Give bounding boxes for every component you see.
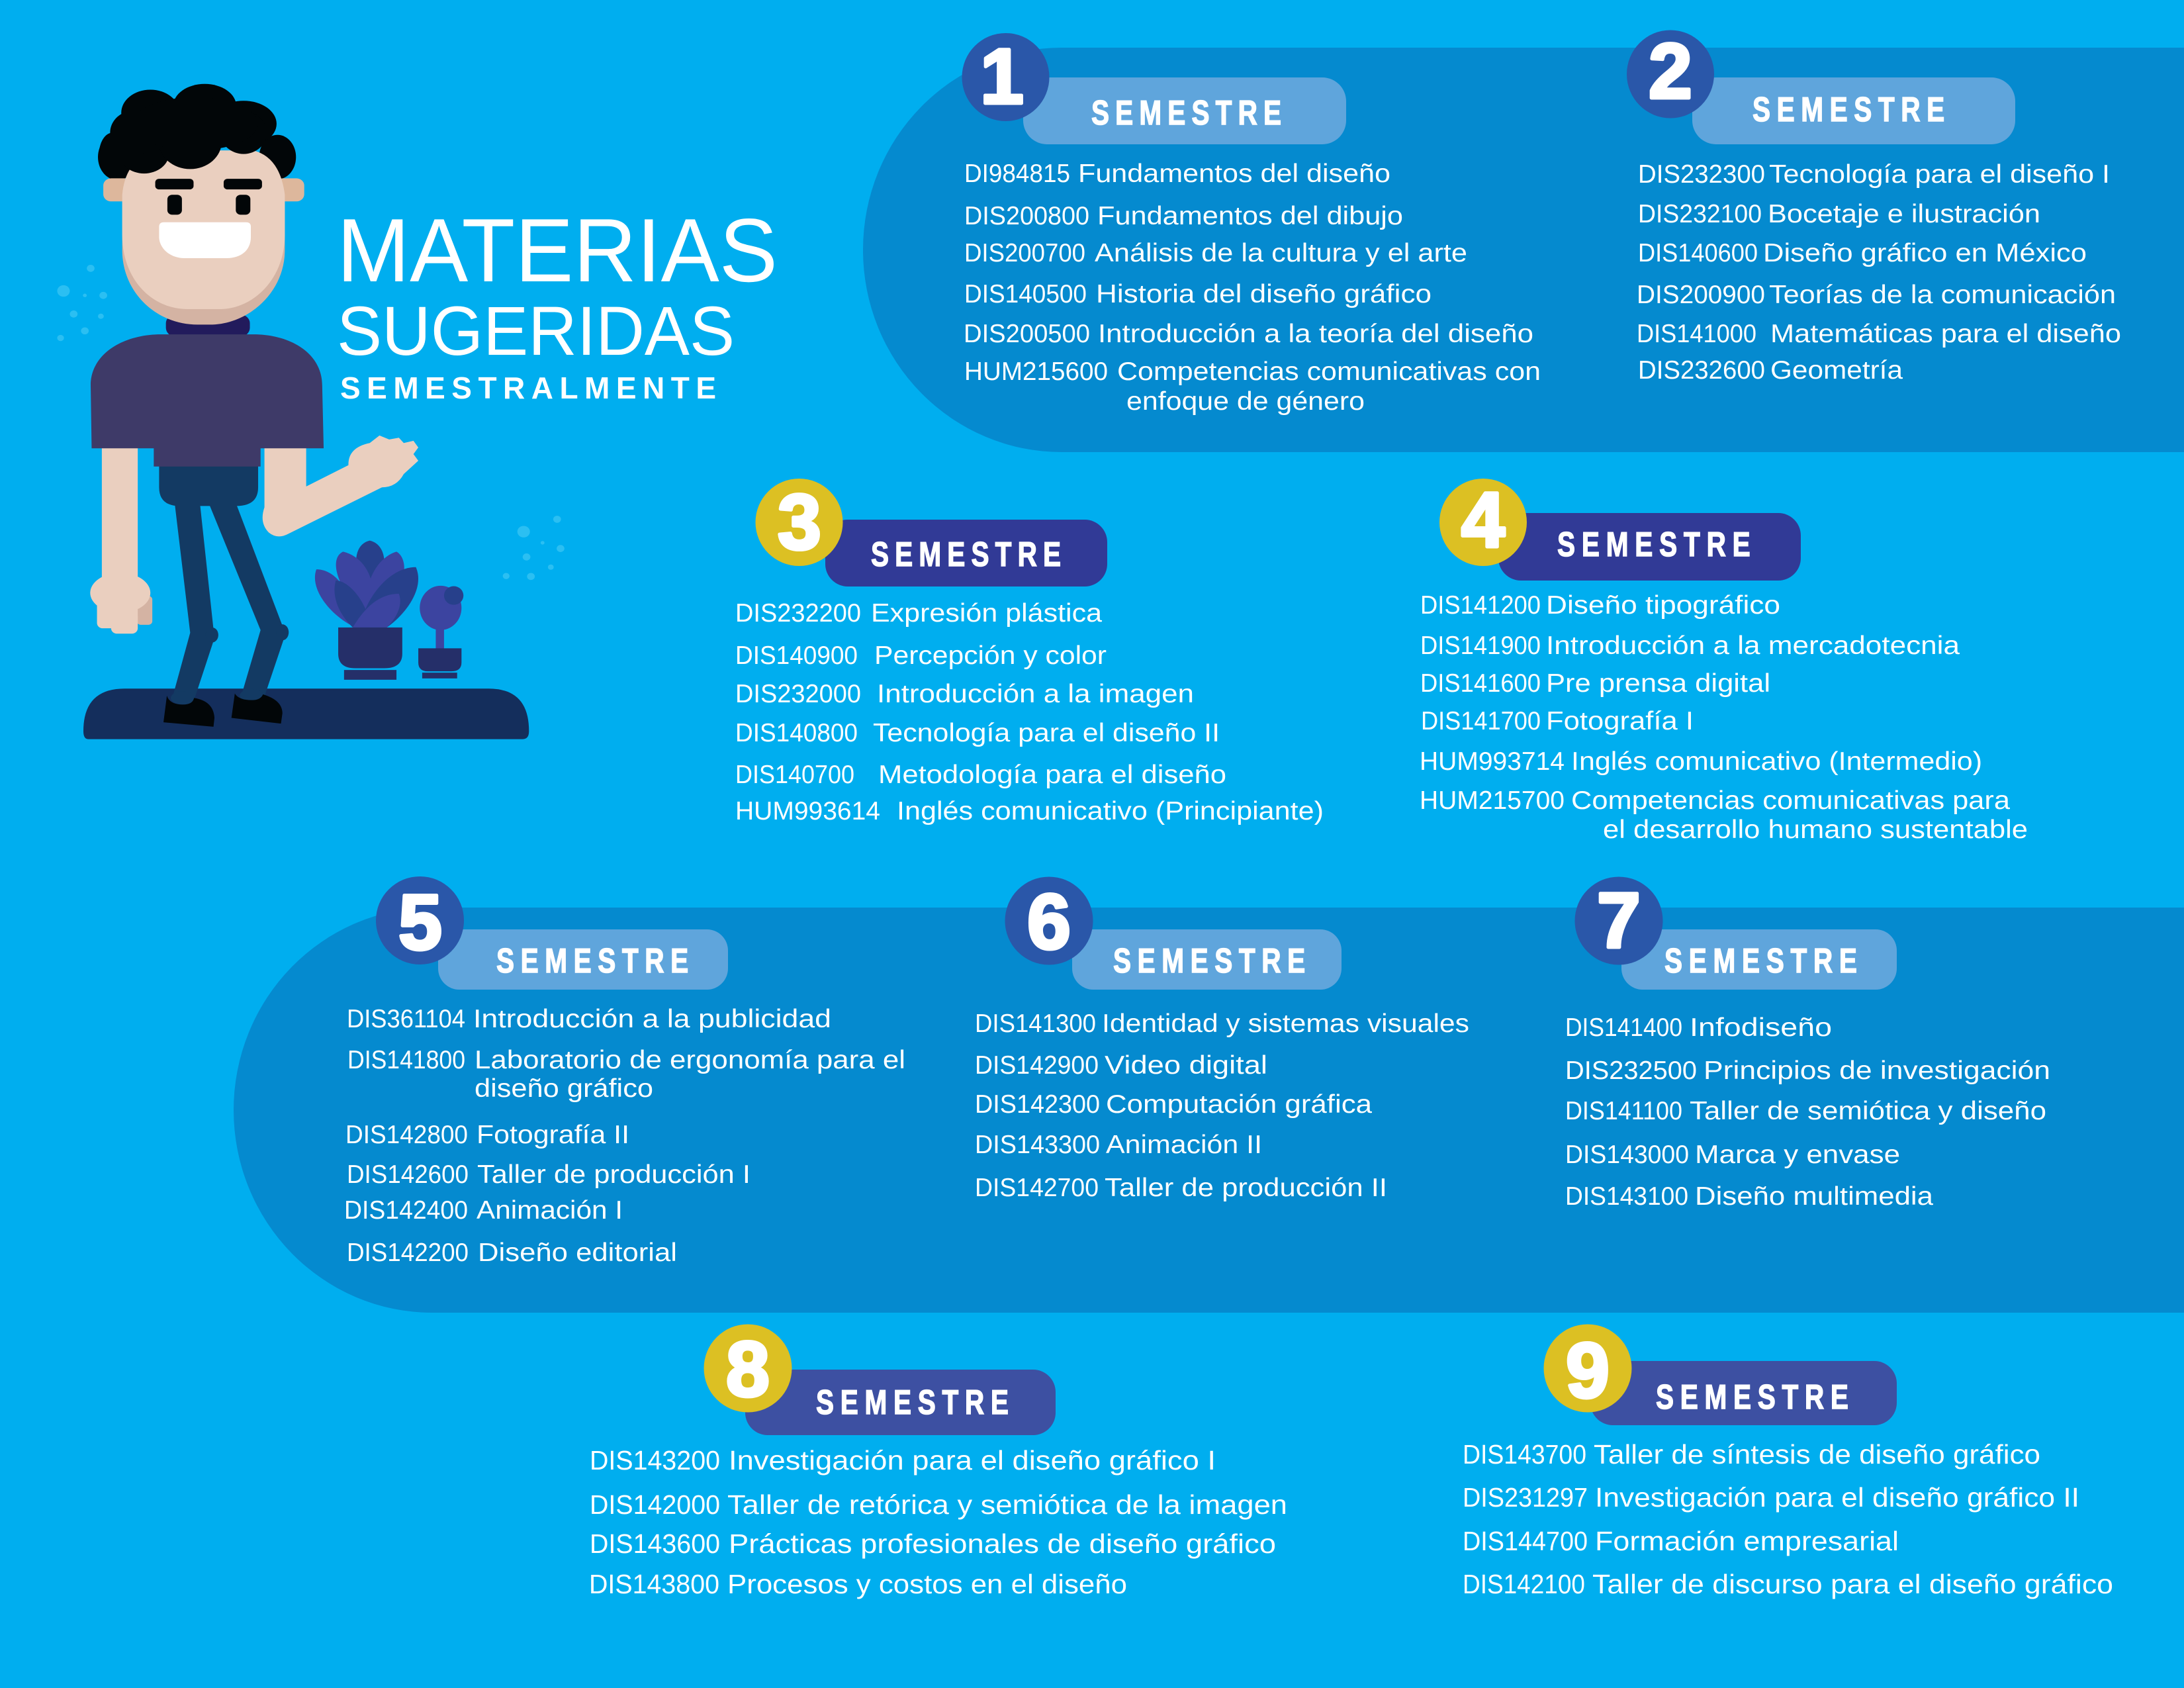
number badge: [756, 479, 843, 566]
heading pill: [1590, 1361, 1897, 1425]
course list: [1637, 160, 2121, 385]
course list: Tecnología para el diseño I: [1769, 160, 2110, 189]
neck: [166, 314, 250, 337]
course list: HUM993614: [735, 797, 880, 825]
course list: Taller de producción I: [477, 1160, 751, 1189]
course list: Video digital: [1105, 1051, 1267, 1080]
course list: DIS200700: [964, 239, 1085, 267]
course list: DIS141800: [347, 1046, 465, 1074]
course list: DIS232600: [1638, 356, 1765, 385]
hair back: [98, 134, 296, 180]
number badge: 6: [1027, 878, 1071, 966]
decorative dots right: [503, 516, 565, 580]
smile: [159, 222, 251, 258]
course list: [344, 1005, 905, 1267]
course list: Diseño editorial: [478, 1239, 677, 1267]
course list: Taller de síntesis de diseño gráfico: [1594, 1439, 2040, 1470]
course list: DIS142800: [345, 1121, 468, 1149]
ears: [103, 178, 304, 201]
course list: DIS142700: [975, 1174, 1099, 1202]
course list: Expresión plástica: [871, 599, 1102, 628]
panel: semester 6: [975, 876, 1469, 1202]
heading pill: SEMESTRE: [871, 535, 1061, 573]
panel: semester 4: [1420, 477, 2028, 844]
course list: Teorías de la comunicación: [1769, 281, 2116, 309]
course list: Introducción a la mercadotecnia: [1546, 632, 1960, 660]
course list: Computación gráfica: [1106, 1090, 1372, 1119]
course list: HUM215700: [1420, 786, 1565, 815]
heading pill: [1498, 513, 1801, 581]
heading pill: [1023, 77, 1346, 144]
course list: Laboratorio de ergonomía para el: [475, 1046, 905, 1074]
heading pill: SEMESTRE: [1557, 525, 1751, 563]
course list: DI984815: [964, 160, 1070, 188]
panel: semester 5: [344, 876, 905, 1267]
title line 2: SUGERIDAS: [337, 293, 735, 370]
panel: semester 8: [589, 1324, 1287, 1599]
course list: DIS232000: [735, 680, 861, 708]
eyes: [167, 195, 250, 214]
heading pill: [438, 929, 728, 990]
number badge: 4: [1461, 477, 1505, 564]
course list: DIS232100: [1638, 200, 1762, 228]
panel: semester 7: [1565, 876, 2050, 1211]
course list: DIS143100: [1565, 1182, 1688, 1211]
course list: [1420, 591, 2028, 844]
course list: Animación II: [1106, 1131, 1262, 1159]
course list: DIS142000: [590, 1489, 720, 1520]
heading pill: SEMESTRE: [816, 1383, 1009, 1421]
course list: DIS232300: [1638, 160, 1765, 189]
course list: Taller de semiótica y diseño: [1690, 1097, 2046, 1125]
course list: DIS142900: [975, 1051, 1099, 1080]
title line 1: MATERIAS: [337, 200, 778, 301]
course list: Taller de discurso para el diseño gráfico: [1592, 1569, 2113, 1599]
course list: DIS140700: [735, 761, 854, 789]
course list: enfoque de género: [1126, 387, 1365, 416]
course list: [964, 160, 1541, 416]
number badge: [1439, 477, 1527, 566]
heading pill: [825, 520, 1107, 586]
course list: DIS143300: [975, 1131, 1100, 1159]
course list: Diseño multimedia: [1695, 1182, 1933, 1211]
shirt: [91, 334, 324, 467]
course list: DIS141600: [1420, 669, 1541, 698]
course list: Competencias comunicativas con: [1117, 357, 1541, 386]
course list: DIS140900: [735, 641, 858, 670]
course list: Geometría: [1770, 356, 1903, 385]
face shadow: [122, 199, 285, 324]
course list: DIS141000: [1637, 320, 1756, 348]
heading pill: [1072, 929, 1342, 990]
hair front: [99, 84, 277, 177]
legs: [171, 503, 289, 704]
course list: DIS143600: [590, 1528, 720, 1559]
course list: DIS140600: [1638, 239, 1758, 267]
course list: Animación I: [477, 1196, 623, 1225]
course list: DIS143800: [589, 1569, 719, 1599]
course list: DIS361104: [347, 1005, 465, 1033]
heading pill: [745, 1370, 1056, 1435]
course list: DIS141100: [1565, 1097, 1682, 1125]
number badge: [1627, 28, 1714, 118]
course list: Prácticas profesionales de diseño gráfico: [729, 1528, 1276, 1559]
course list: [1463, 1439, 2113, 1599]
course list: Inglés comunicativo (Principiante): [897, 797, 1324, 825]
course list: HUM215600: [964, 357, 1108, 386]
panel: semester 1: [962, 33, 1541, 416]
course list: Fundamentos del diseño: [1078, 160, 1390, 188]
panel: semester 9: [1463, 1324, 2113, 1599]
course list: Introducción a la imagen: [877, 680, 1194, 708]
course list: Competencias comunicativas para: [1571, 786, 2010, 815]
number badge: [1575, 876, 1662, 965]
subtitle: SEMESTRALMENTE: [340, 371, 716, 405]
course list: Fotografía I: [1546, 707, 1694, 735]
course list: DIS200500: [964, 320, 1090, 348]
course list: Formación empresarial: [1595, 1526, 1899, 1556]
heading pill: SEMESTRE: [1091, 93, 1281, 132]
number badge: 2: [1649, 28, 1692, 115]
course list: DIS142200: [347, 1239, 469, 1267]
large potted plant: [315, 541, 418, 680]
course list: Matemáticas para el diseño: [1770, 320, 2121, 348]
course list: [1565, 1013, 2050, 1211]
course list: DIS231297: [1463, 1482, 1588, 1513]
course list: Pre prensa digital: [1546, 669, 1770, 698]
heading pill: [1692, 77, 2015, 144]
course list: [735, 599, 1324, 825]
number badge: [962, 33, 1050, 121]
raised arm and hand: [263, 436, 418, 536]
course list: el desarrollo humano sustentable: [1603, 816, 2028, 844]
heading pill: SEMESTRE: [1656, 1378, 1848, 1416]
course list: DIS142300: [975, 1090, 1100, 1119]
number badge: [1543, 1324, 1632, 1415]
course list: Percepción y color: [874, 641, 1107, 670]
course list: Marca y envase: [1695, 1141, 1900, 1169]
course list: [589, 1445, 1287, 1599]
course list: DIS142400: [344, 1196, 468, 1225]
course list: DIS200800: [964, 202, 1089, 230]
course list: Identidad y sistemas visuales: [1102, 1009, 1469, 1038]
course list: Fundamentos del dibujo: [1097, 202, 1403, 230]
course list: Introducción a la publicidad: [473, 1005, 831, 1033]
course list: DIS142100: [1463, 1569, 1585, 1599]
shoes: [163, 694, 283, 727]
heading pill: SEMESTRE: [496, 941, 688, 980]
course list: Metodología para el diseño: [878, 761, 1226, 789]
course list: DIS143200: [590, 1445, 720, 1476]
course list: Infodiseño: [1690, 1013, 1832, 1042]
course list: Historia del diseño gráfico: [1096, 280, 1432, 308]
floor: [83, 688, 529, 739]
course list: [975, 1009, 1469, 1202]
course list: DIS140500: [964, 280, 1087, 308]
course list: Taller de retórica y semiótica de la imagen: [727, 1489, 1287, 1520]
course list: Principios de investigación: [1704, 1056, 2050, 1085]
course list: DIS232500: [1565, 1056, 1697, 1085]
course list: DIS141900: [1420, 632, 1541, 660]
course list: Inglés comunicativo (Intermedio): [1571, 747, 1982, 776]
course list: Introducción a la teoría del diseño: [1098, 320, 1533, 348]
panel: semester 3: [735, 479, 1324, 825]
title: [337, 200, 778, 405]
course list: DIS141200: [1420, 591, 1541, 620]
course list: diseño gráfico: [475, 1074, 653, 1103]
heading pill: SEMESTRE: [1113, 941, 1305, 980]
number badge: 1: [980, 33, 1024, 120]
number badge: 3: [778, 479, 821, 566]
number badge: 7: [1597, 877, 1641, 964]
number badge: [376, 876, 464, 966]
number badge: [704, 1324, 792, 1413]
course list: Investigación para el diseño gráfico II: [1595, 1482, 2079, 1513]
illustration: character and plants: [57, 84, 565, 739]
course list: Bocetaje e ilustración: [1768, 200, 2040, 228]
left arm and fist: [90, 447, 152, 633]
course list: DIS144700: [1463, 1526, 1588, 1556]
course list: Diseño gráfico en México: [1763, 239, 2087, 267]
number badge: 8: [726, 1326, 770, 1413]
course list: DIS143000: [1565, 1141, 1689, 1169]
heading pill: SEMESTRE: [1664, 941, 1857, 980]
course list: Análisis de la cultura y el arte: [1095, 239, 1467, 267]
panel background: semesters 5 to 7: [234, 908, 2184, 1313]
panel background: semesters 1 and 2: [863, 48, 2184, 452]
panel: semester 2: [1627, 28, 2121, 385]
course list: Procesos y costos en el diseño: [727, 1569, 1127, 1599]
course list: Investigación para el diseño gráfico I: [729, 1445, 1216, 1476]
eyebrows: [156, 179, 262, 189]
course list: DIS143700: [1463, 1439, 1586, 1470]
character: [90, 84, 418, 727]
heading pill: SEMESTRE: [1752, 90, 1944, 128]
course list: DIS140800: [735, 719, 858, 747]
course list: DIS141300: [975, 1009, 1096, 1038]
course list: DIS142600: [347, 1160, 469, 1189]
course list: DIS232200: [735, 599, 861, 628]
course list: DIS141700: [1421, 707, 1541, 735]
course list: Tecnología para el diseño II: [873, 719, 1220, 747]
course list: HUM993714: [1420, 747, 1565, 776]
small potted plant: [418, 586, 463, 679]
course list: Fotografía II: [477, 1121, 629, 1149]
face: [122, 150, 285, 309]
decorative dots left: [57, 265, 107, 341]
number badge: 5: [398, 879, 442, 966]
hips: [159, 463, 258, 506]
course list: DIS141400: [1565, 1013, 1682, 1042]
course list: Taller de producción II: [1105, 1174, 1387, 1202]
number badge: [1005, 876, 1093, 966]
course list: DIS200900: [1637, 281, 1765, 309]
heading pill: [1621, 929, 1897, 990]
course list: Diseño tipográfico: [1546, 591, 1780, 620]
number badge: 9: [1566, 1327, 1610, 1415]
